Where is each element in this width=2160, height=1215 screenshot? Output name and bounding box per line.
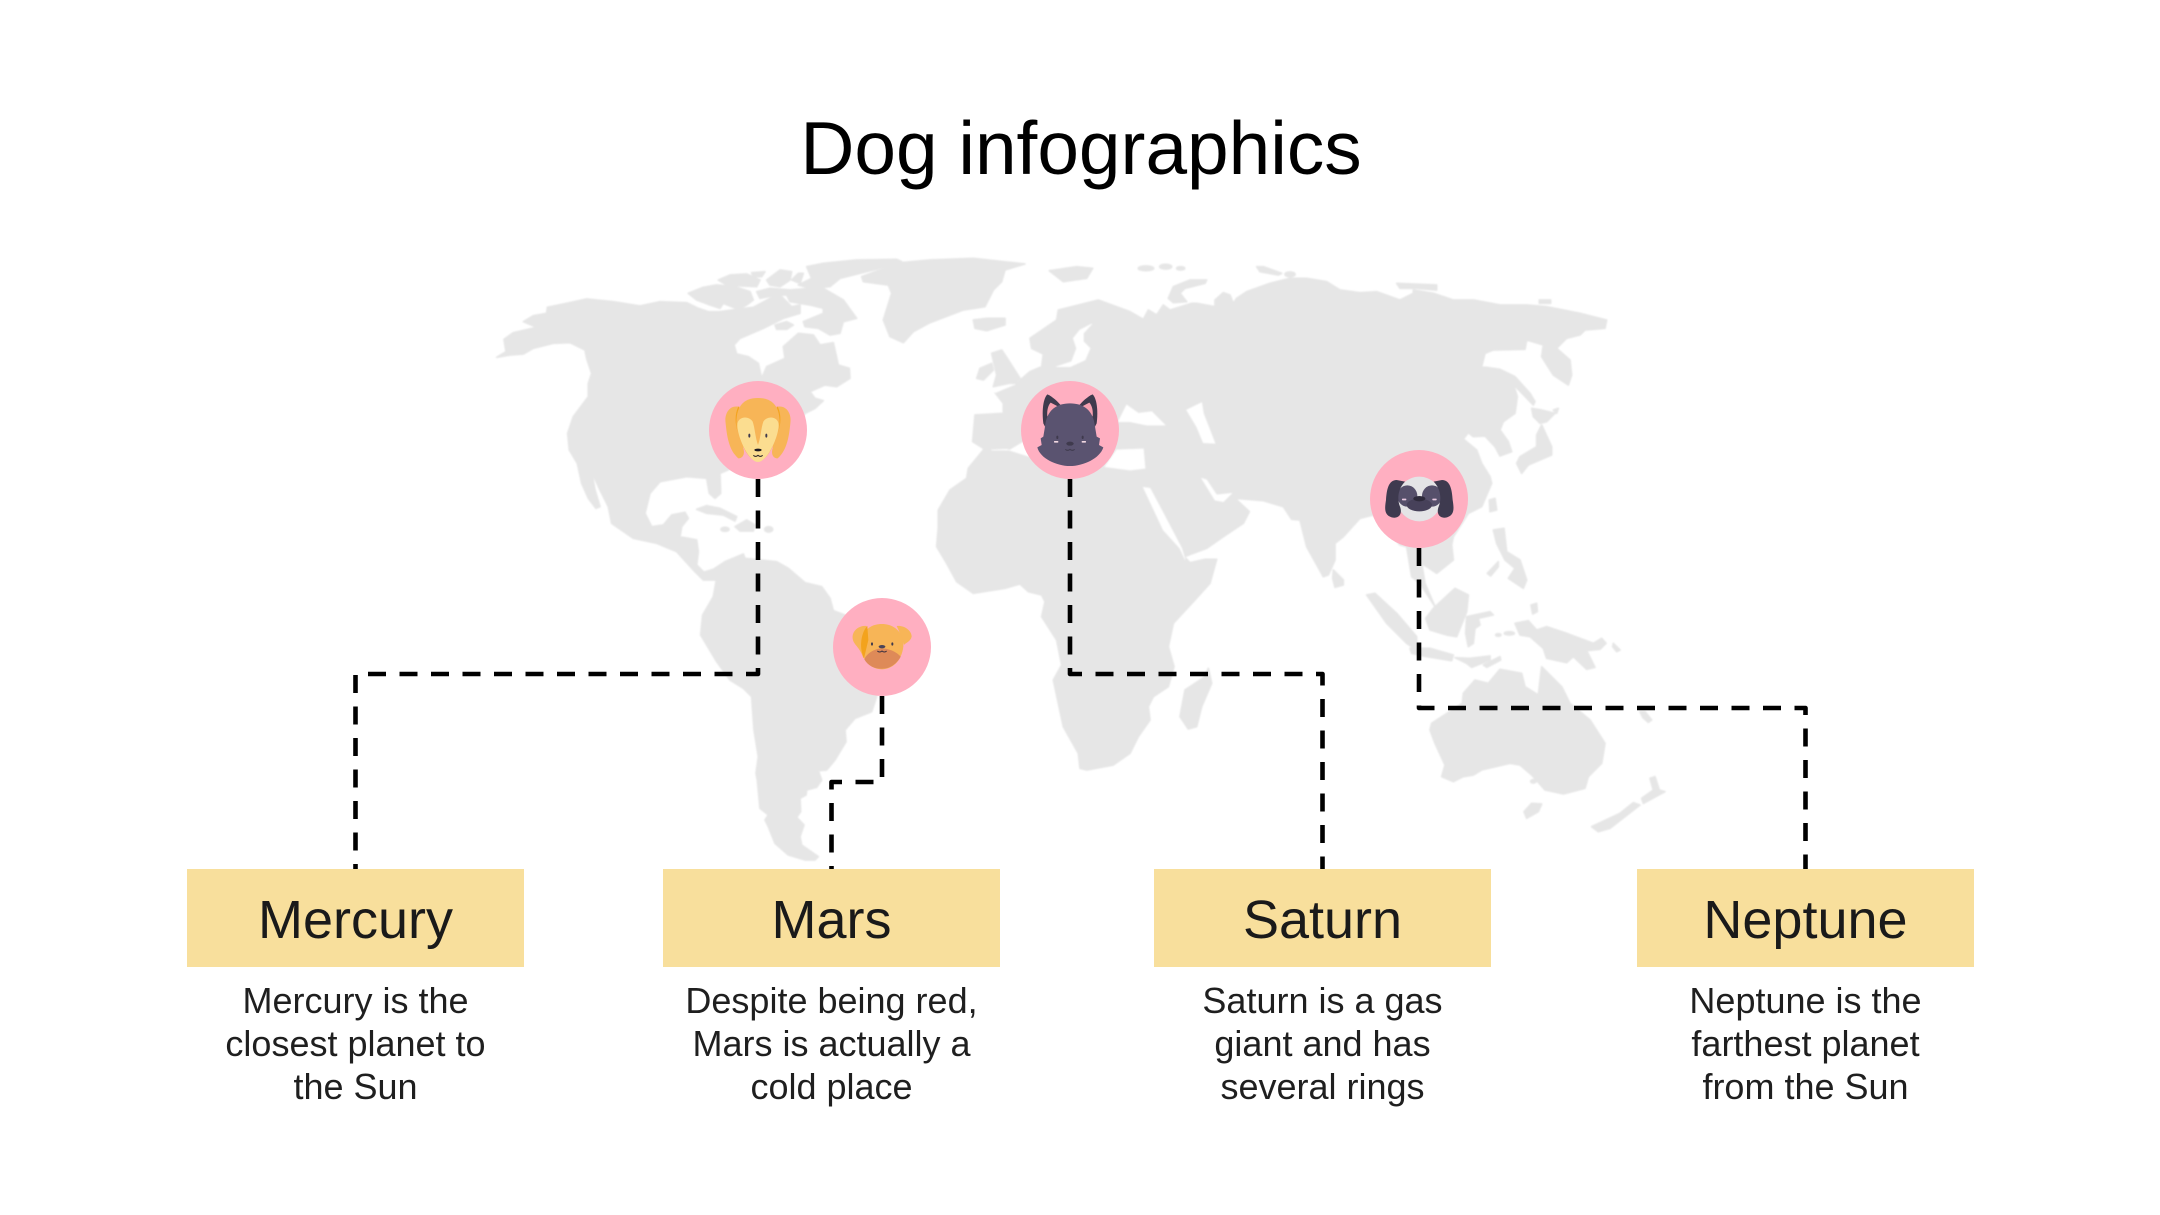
card: Neptune: from the Sun [1702, 1066, 1909, 1107]
world map [497, 258, 1665, 860]
connector: Saturn [1070, 479, 1322, 869]
card: Mars: Despite being red, [685, 980, 978, 1021]
card: Mercury: Mercury [258, 890, 453, 950]
connector: Mercury [356, 479, 758, 869]
card: Mars: Mars is actually a [692, 1023, 972, 1064]
card: Mars: cold place [750, 1066, 913, 1107]
card: Neptune: farthest planet [1691, 1023, 1920, 1064]
card: Saturn: Saturn [1243, 890, 1402, 950]
card: Saturn: Saturn is a gas [1202, 980, 1443, 1021]
card: Saturn: giant and has [1214, 1023, 1431, 1064]
card: Saturn [1154, 869, 1491, 1107]
connector: Neptune [1419, 548, 1806, 869]
card: Mercury: the Sun [293, 1066, 418, 1107]
card: Neptune: Neptune is the [1689, 980, 1922, 1021]
marker: pug dog [833, 598, 931, 696]
marker: dark pointy-eared dog [1021, 381, 1119, 479]
card: Saturn: several rings [1220, 1066, 1425, 1107]
marker: dark floppy-eared dog [1370, 450, 1468, 548]
card: Mars: Mars [772, 890, 892, 950]
card: Mars [663, 869, 1000, 1107]
connector: Mars [832, 696, 882, 869]
title: Dog infographics [800, 106, 1362, 190]
card: Mercury [187, 869, 524, 1107]
card: Mercury: closest planet to [225, 1023, 486, 1064]
card: Mercury: Mercury is the [242, 980, 469, 1021]
card: Neptune: Neptune [1703, 890, 1908, 950]
card: Neptune [1637, 869, 1974, 1107]
marker: golden long-eared dog [709, 381, 807, 479]
